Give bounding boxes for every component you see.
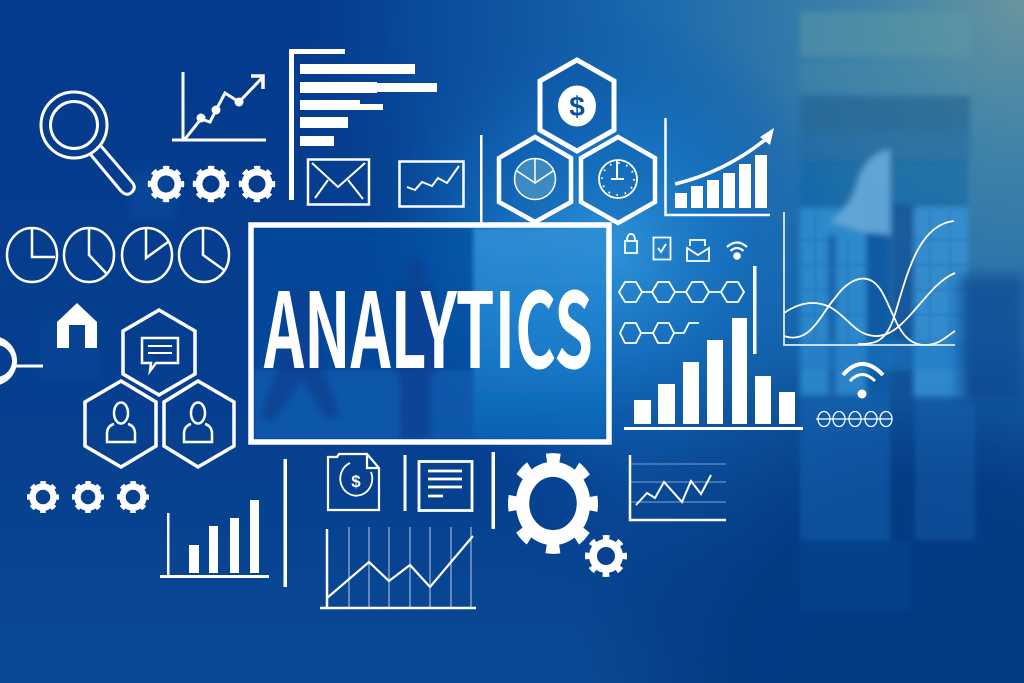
hexagon chains xyxy=(619,282,744,343)
icon: pie chart hexagon xyxy=(499,137,571,222)
icon: magnifying glass xyxy=(41,92,134,194)
icon: row of three gears, lower left xyxy=(29,483,147,511)
small icons row: lock, checklist, mail, wifi xyxy=(625,234,747,261)
icon: dollar hexagon: $ xyxy=(569,91,585,122)
icon: person hexagon right xyxy=(164,381,234,467)
line chart, bottom center xyxy=(320,527,476,608)
icon: big gear xyxy=(512,458,594,549)
bar chart with rising arrow xyxy=(666,118,774,215)
divider beside hexagon chains xyxy=(753,266,756,354)
icon: dollar document: $ xyxy=(351,472,361,491)
title panel xyxy=(251,225,609,442)
icon: chat hexagon xyxy=(123,310,195,395)
curves line chart xyxy=(784,212,955,345)
pie icon 2 xyxy=(64,228,114,282)
pie icon 1 xyxy=(7,228,57,282)
horizontal bar chart xyxy=(289,49,437,200)
icon: clipped circle with line xyxy=(0,337,43,385)
pie chart icons xyxy=(7,228,229,282)
icon: dollar document xyxy=(328,454,379,510)
icon: dollar hexagon xyxy=(540,60,614,151)
line chart with arrow, top left xyxy=(172,72,266,140)
icon: clock hexagon xyxy=(581,137,655,223)
hexagon cluster: finance xyxy=(499,60,655,223)
icon: wifi signal xyxy=(843,364,883,398)
hexagon cluster: people and chat xyxy=(85,310,234,467)
divider, bottom xyxy=(284,459,287,587)
icon: house xyxy=(57,303,97,348)
pie icon 4 xyxy=(179,228,229,282)
icon: person hexagon left xyxy=(85,381,156,467)
divider beside document xyxy=(404,455,406,511)
icon: row of three gears, top xyxy=(150,168,273,200)
divider beside hexagons xyxy=(480,135,482,223)
line chart, bottom right xyxy=(630,455,726,520)
icon: small line chart in box xyxy=(400,162,464,206)
bar chart, bottom left xyxy=(160,500,269,578)
icon: chain of circles xyxy=(816,412,892,426)
icon: envelope in box xyxy=(308,160,369,204)
divider beside gear xyxy=(492,452,495,529)
large bar chart xyxy=(624,318,803,430)
pie icon 3 xyxy=(122,228,172,282)
title text: ANALYTICS xyxy=(263,247,593,398)
icon: text document xyxy=(419,462,472,510)
icon: small gear xyxy=(588,538,624,574)
